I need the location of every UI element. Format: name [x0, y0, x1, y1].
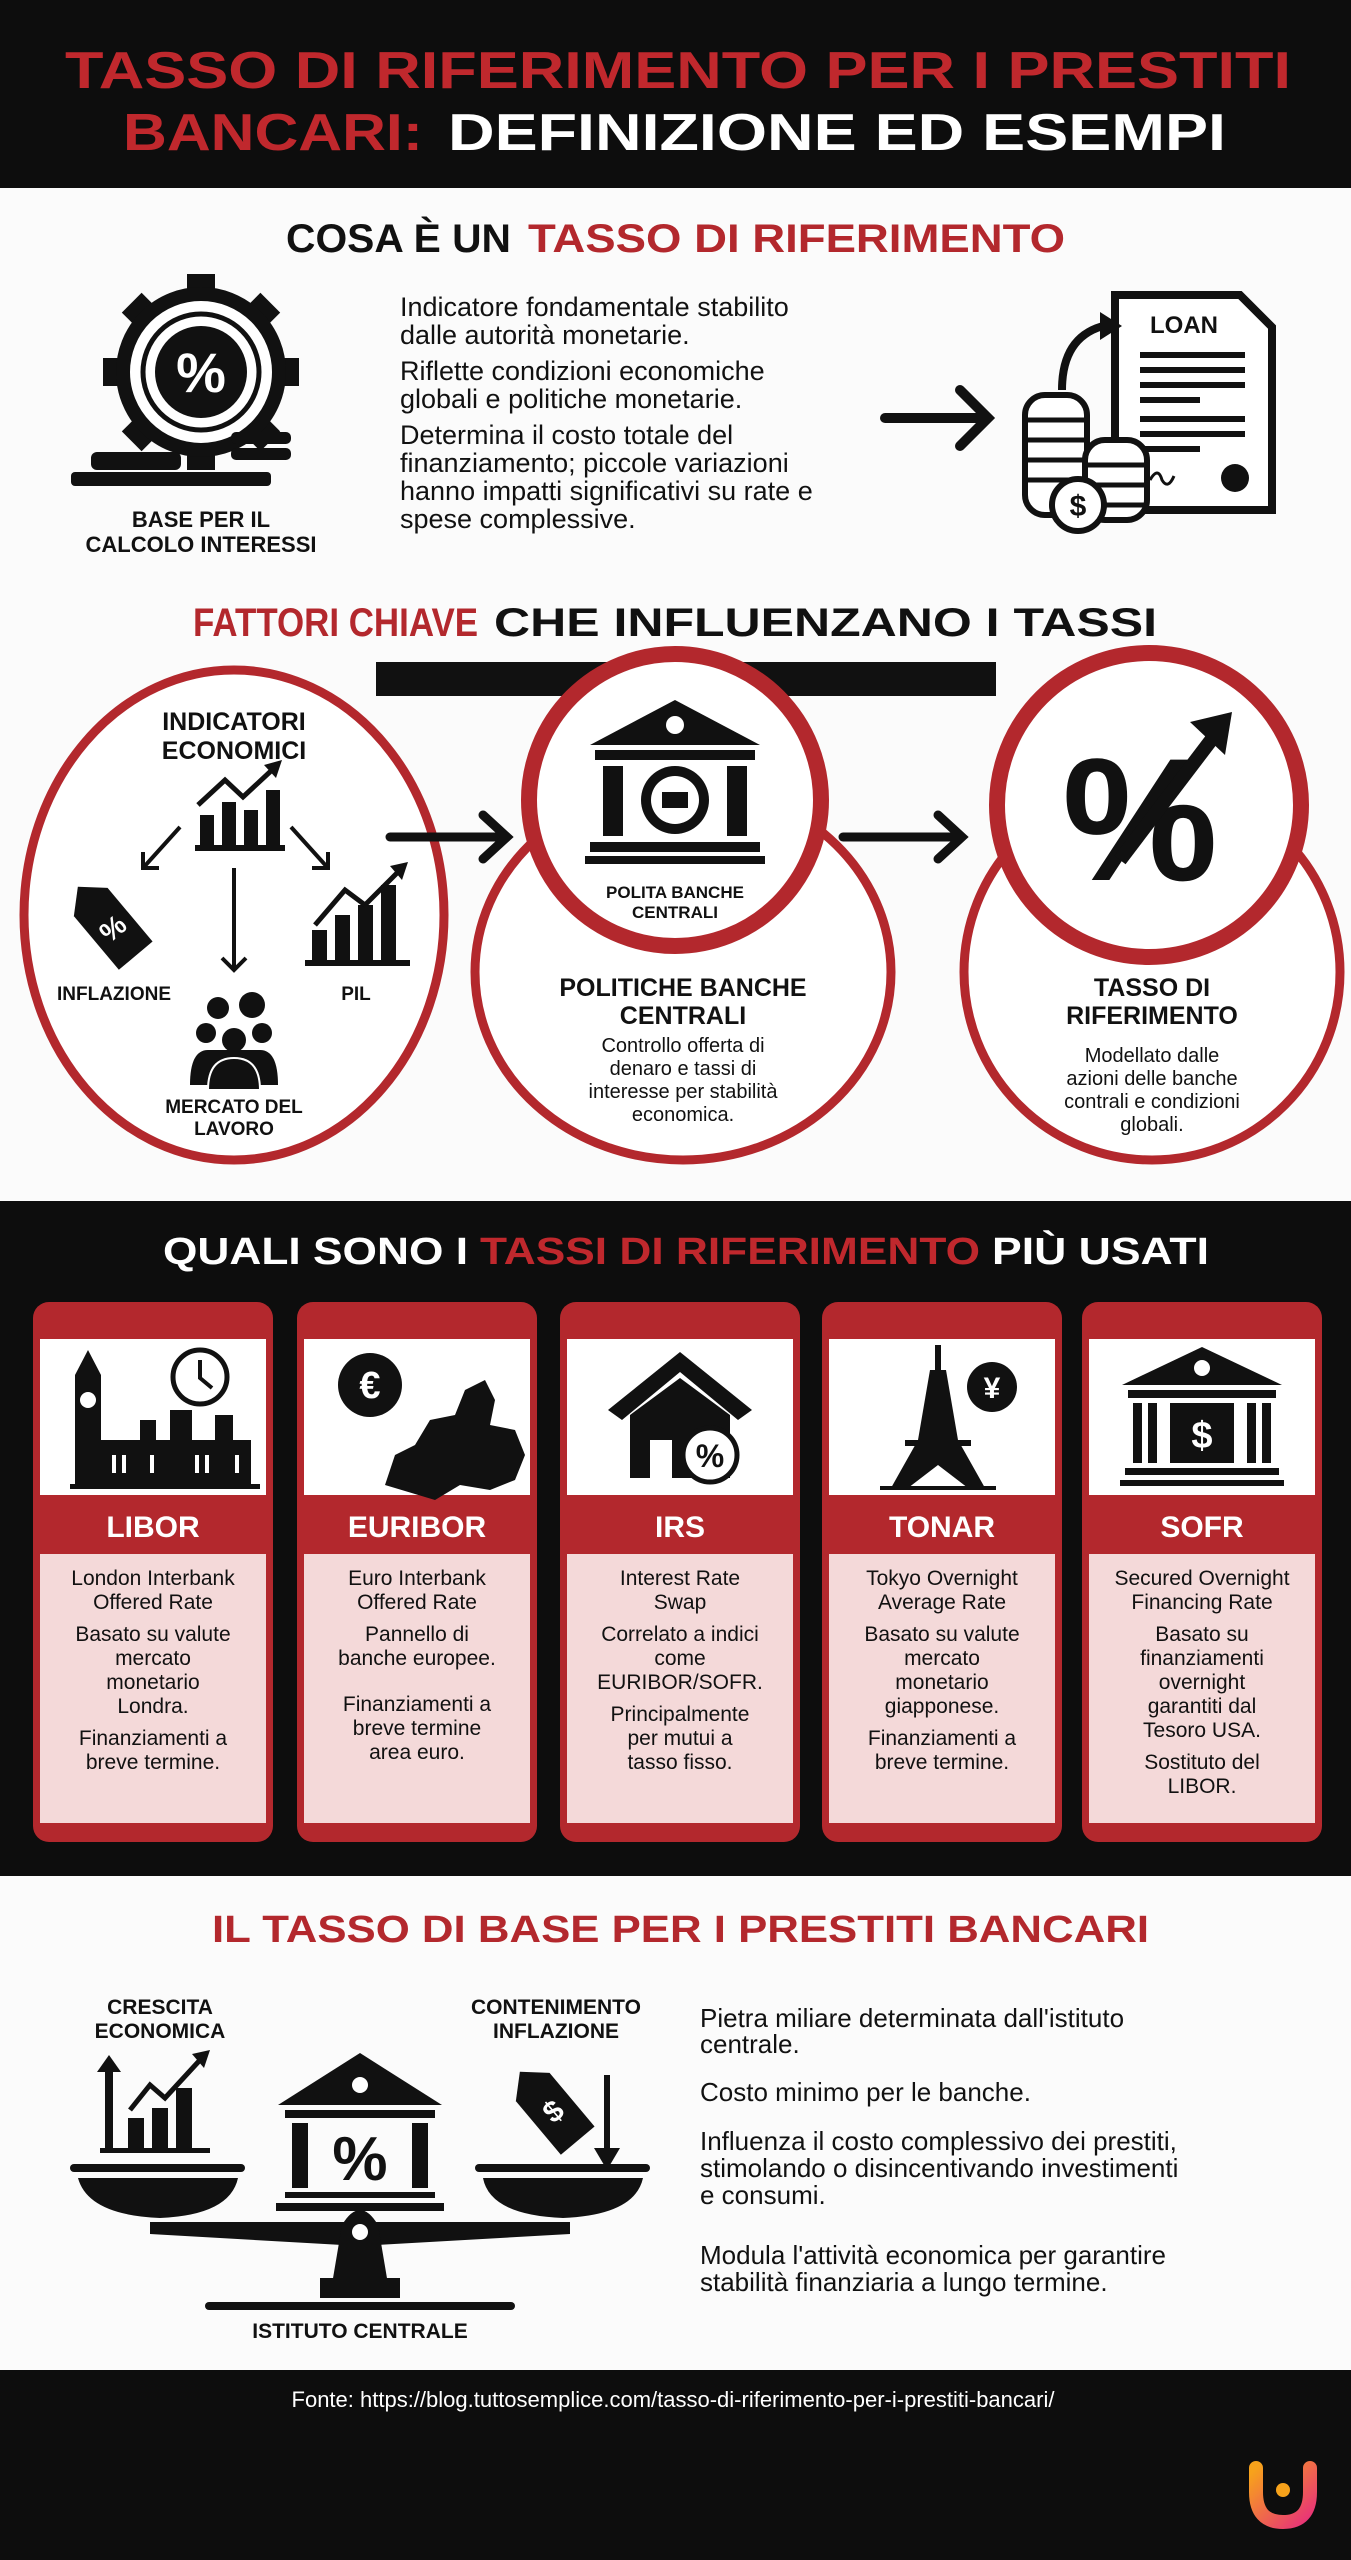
- panel: politiche banche centrali: CENTRALI: [620, 1002, 746, 1030]
- panel: tasso di riferimento: TASSO DI: [1094, 974, 1210, 1002]
- panel: indicatori economici: ECONOMICI: [162, 737, 306, 765]
- card: EURIBOR: Euro Interbank: [348, 1567, 486, 1590]
- icon: big ben and parliament: [70, 1350, 260, 1489]
- panel: indicatori economici: LAVORO: [194, 1119, 274, 1140]
- icon: bank with percent: [276, 2053, 444, 2211]
- label: base per il calcolo interessi: CALCOLO INTERESSI: [85, 532, 317, 557]
- card: SOFR: SOFR: [1160, 1511, 1244, 1544]
- card: SOFR: garantiti dal: [1148, 1695, 1256, 1718]
- title: [65, 42, 1291, 162]
- header band: [0, 0, 1351, 188]
- label: base per il calcolo interessi: BASE PER IL: [132, 507, 270, 532]
- illustration: balance scale: INFLAZIONE: [493, 2020, 619, 2043]
- arrow: [390, 815, 507, 859]
- card: SOFR: finanziamenti: [1140, 1647, 1264, 1670]
- panel: politiche banche centrali: denaro e tassi di: [610, 1058, 756, 1080]
- card: EURIBOR: EURIBOR: [348, 1511, 487, 1544]
- card: TONAR: Finanziamenti a: [868, 1727, 1016, 1750]
- icon: house with percent: [608, 1352, 752, 1482]
- illustration: balance scale: ECONOMICA: [95, 2020, 225, 2043]
- card: LIBOR: breve termine.: [86, 1751, 220, 1774]
- illustration: balance scale: CRESCITA: [107, 1996, 213, 2019]
- icon: price tag: %: [93, 909, 132, 948]
- icon: price tag: [61, 873, 153, 970]
- panel: indicatori economici: MERCATO DEL: [165, 1097, 303, 1118]
- card: IRS: Swap: [654, 1591, 706, 1614]
- text block: definition: globali e politiche monetarie.: [400, 384, 742, 414]
- text block: definition: dalle autorità monetarie.: [400, 320, 690, 350]
- text block: definition: Riflette condizioni economiche: [400, 356, 765, 386]
- icon: people with gears: [190, 992, 278, 1090]
- card: LIBOR: Offered Rate: [93, 1591, 213, 1614]
- panel: indicatori economici: INDICATORI: [162, 708, 306, 736]
- card: LIBOR: Londra.: [117, 1695, 189, 1718]
- heading: quali sono i tassi: PIÙ USATI: [992, 1229, 1209, 1273]
- text block: definition: Determina il costo totale del: [400, 420, 733, 450]
- icon: gear with percent: [71, 274, 299, 486]
- icon: euro and europe map: €: [359, 1365, 381, 1407]
- card: IRS: IRS: [655, 1511, 705, 1544]
- card: TONAR: TONAR: [889, 1511, 995, 1544]
- heading: quali sono i tassi: TASSI DI RIFERIMENTO: [480, 1231, 980, 1273]
- illustration: balance scale: ISTITUTO CENTRALE: [252, 2320, 468, 2343]
- title: TASSO DI RIFERIMENTO PER I PRESTITI: [65, 42, 1291, 100]
- card: IRS: tasso fisso.: [627, 1751, 733, 1774]
- card: TONAR: [822, 1302, 1062, 1842]
- card: SOFR: Sostituto del: [1144, 1751, 1260, 1774]
- text block: definition: Indicatore fondamentale stabilito: [400, 292, 789, 322]
- scale: [70, 2164, 650, 2310]
- text block: base rate description: Costo minimo per le banche.: [700, 2077, 1031, 2107]
- panel: indicatori economici: [24, 670, 444, 1160]
- text block: base rate description: Influenza il costo complessivo dei prestiti,: [700, 2126, 1177, 2156]
- panel: politiche banche centrali: POLITA BANCHE: [606, 883, 744, 902]
- card: EURIBOR: Offered Rate: [357, 1591, 477, 1614]
- card: EURIBOR: [297, 1302, 537, 1842]
- text block: base rate description: stabilità finanziaria a lungo termine.: [700, 2267, 1108, 2297]
- text block: base rate description: e consumi.: [700, 2180, 826, 2210]
- card: EURIBOR: breve termine: [353, 1717, 481, 1740]
- card: IRS: per mutui a: [627, 1727, 733, 1750]
- panel: politiche banche centrali: interesse per stabilità: [589, 1081, 778, 1103]
- icon: bank with dollar: [1120, 1347, 1284, 1486]
- heading: il tasso di base: IL TASSO DI BASE PER I PRESTITI BANCARI: [212, 1909, 1149, 1951]
- heading: quali sono i tassi: QUALI SONO I: [163, 1231, 468, 1273]
- card: TONAR: Average Rate: [878, 1591, 1006, 1614]
- illustration: balance scale: [70, 1996, 650, 2343]
- label: base per il calcolo interessi: [85, 507, 317, 557]
- card: LIBOR: Basato su valute: [75, 1623, 231, 1646]
- card: EURIBOR: Finanziamenti a: [343, 1693, 491, 1716]
- icon: growth chart: [97, 2050, 210, 2153]
- arrow: [885, 390, 988, 446]
- card: EURIBOR: banche europee.: [338, 1647, 496, 1670]
- icon: percent with arrow: %: [1062, 723, 1218, 918]
- icon: tokyo tower and yen: [880, 1345, 1017, 1490]
- panel: tasso di riferimento: azioni delle banche: [1066, 1068, 1238, 1090]
- illustration: balance scale: CONTENIMENTO: [471, 1996, 641, 2019]
- logo: [1256, 2468, 1310, 2522]
- section 1: cosa e un tasso: [71, 216, 1272, 557]
- card: TONAR: giapponese.: [885, 1695, 999, 1718]
- panel: tasso di riferimento: RIFERIMENTO: [1066, 1002, 1238, 1030]
- icon: loan document with coins: [1025, 295, 1272, 531]
- panel: tasso di riferimento: Modellato dalle: [1085, 1045, 1219, 1067]
- card: LIBOR: [33, 1302, 273, 1842]
- icon: loan document with coins: $: [1070, 490, 1087, 523]
- icon: loan document with coins: LOAN: [1150, 312, 1218, 339]
- card: TONAR: mercato: [904, 1647, 980, 1670]
- heading: cosa e un tasso di riferimento: [286, 216, 1065, 261]
- icon: bank with dollar: $: [1191, 1415, 1213, 1457]
- text block: base rate description: Pietra miliare determinata dall'istituto: [700, 2003, 1124, 2033]
- icon: euro and europe map: [338, 1353, 525, 1500]
- panel: indicatori economici: PIL: [341, 984, 371, 1005]
- source text: Fonte: https://blog.tuttosemplice.com/tasso-di-riferimento-per-i-prestiti-bancari/: [292, 2387, 1055, 2412]
- card: SOFR: overnight: [1159, 1671, 1245, 1694]
- title: BANCARI:: [123, 104, 423, 162]
- card: SOFR: LIBOR.: [1168, 1775, 1236, 1798]
- card: LIBOR: mercato: [115, 1647, 191, 1670]
- panel: tasso di riferimento: [964, 653, 1340, 1160]
- heading: cosa e un tasso di riferimento: TASSO DI RIFERIMENTO: [528, 217, 1065, 261]
- card: LIBOR: Finanziamenti a: [79, 1727, 227, 1750]
- card: IRS: Interest Rate: [620, 1567, 740, 1590]
- card: SOFR: Tesoro USA.: [1143, 1719, 1261, 1742]
- icon: central bank: [585, 700, 765, 864]
- icon: pil chart: [305, 862, 410, 966]
- card: TONAR: Tokyo Overnight: [866, 1567, 1018, 1590]
- icon: tag with dollar: $: [537, 2094, 571, 2130]
- icon: bank with percent: %: [332, 2125, 388, 2194]
- text block: base rate description: Modula l'attività economica per garantire: [700, 2240, 1166, 2270]
- section 3: tassi più usati: [0, 1201, 1351, 1876]
- footer: [0, 2370, 1351, 2560]
- card: LIBOR: London Interbank: [71, 1567, 235, 1590]
- card: SOFR: [1082, 1302, 1322, 1842]
- card: LIBOR: monetario: [106, 1671, 200, 1694]
- section 2: fattori chiave: [24, 601, 1340, 1160]
- section 4: tasso di base: [70, 1909, 1178, 2343]
- heading: quali sono i tassi: [163, 1229, 1209, 1273]
- heading: cosa e un tasso di riferimento: COSA È UN: [286, 216, 511, 261]
- panel: politiche banche centrali: economica.: [632, 1104, 734, 1126]
- panel: politiche banche centrali: [475, 654, 891, 1160]
- heading: fattori chiave: CHE INFLUENZANO I TASSI: [494, 601, 1157, 645]
- text block: definition: spese complessive.: [400, 504, 636, 534]
- card: TONAR: breve termine.: [875, 1751, 1009, 1774]
- card: TONAR: monetario: [895, 1671, 989, 1694]
- icon: house with percent: %: [696, 1438, 724, 1474]
- text block: base rate description: [700, 2003, 1178, 2297]
- card: TONAR: Basato su valute: [864, 1623, 1020, 1646]
- card: IRS: EURIBOR/SOFR.: [597, 1671, 763, 1694]
- arrow: [843, 815, 962, 859]
- panel: politiche banche centrali: POLITICHE BANCHE: [559, 974, 807, 1002]
- panel: politiche banche centrali: Controllo offerta di: [601, 1035, 765, 1057]
- heading: fattori chiave: FATTORI CHIAVE: [193, 601, 478, 645]
- card: IRS: [560, 1302, 800, 1842]
- heading: fattori chiave: [193, 601, 1157, 645]
- text block: base rate description: stimolando o disincentivando investimenti: [700, 2153, 1178, 2183]
- card: SOFR: Basato su: [1155, 1623, 1249, 1646]
- card: IRS: come: [654, 1647, 706, 1670]
- icon: gear with percent: %: [176, 341, 226, 404]
- text block: definition: [400, 292, 813, 534]
- card: IRS: Correlato a indici: [601, 1623, 759, 1646]
- icon: growth chart: [195, 760, 285, 851]
- card: EURIBOR: area euro.: [369, 1741, 465, 1764]
- icon: tokyo tower and yen: ¥: [984, 1372, 1001, 1405]
- panel: politiche banche centrali: CENTRALI: [632, 903, 718, 922]
- icon: tag with dollar: [503, 2058, 620, 2170]
- card: IRS: Principalmente: [611, 1703, 749, 1726]
- card: SOFR: Financing Rate: [1131, 1591, 1273, 1614]
- card: EURIBOR: Pannello di: [365, 1623, 469, 1646]
- panel: indicatori economici: INFLAZIONE: [57, 984, 171, 1005]
- card: SOFR: Secured Overnight: [1114, 1567, 1290, 1590]
- panel: tasso di riferimento: contrali e condizioni: [1064, 1091, 1240, 1113]
- card: LIBOR: LIBOR: [106, 1511, 200, 1544]
- text block: definition: finanziamento; piccole variazioni: [400, 448, 789, 478]
- text block: definition: hanno impatti significativi su rate e: [400, 476, 813, 506]
- title: DEFINIZIONE ED ESEMPI: [448, 104, 1226, 162]
- text block: base rate description: centrale.: [700, 2029, 800, 2059]
- panel: tasso di riferimento: globali.: [1120, 1114, 1184, 1136]
